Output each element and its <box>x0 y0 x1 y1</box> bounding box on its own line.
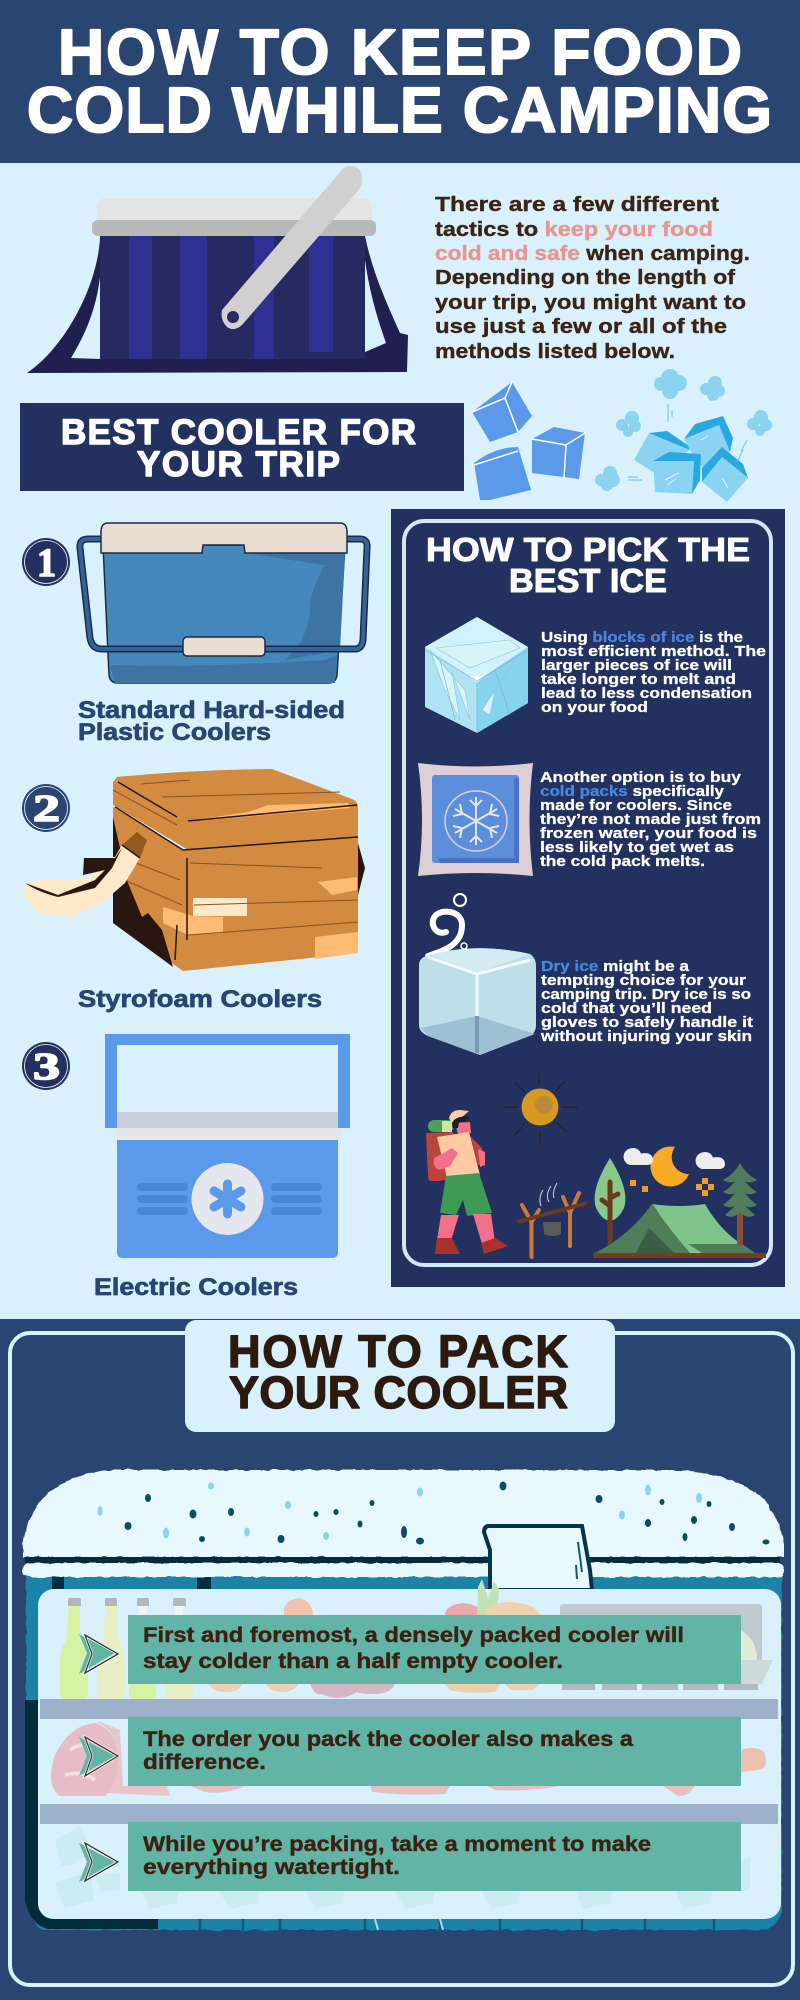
text: cold packs: made for coolers. Since <box>540 798 732 814</box>
icon: hiker <box>426 1110 508 1254</box>
shelf bars <box>40 1699 778 1824</box>
faded food: ice cubes <box>55 1826 750 1909</box>
heading: pick the best ice: BEST ICE <box>509 562 667 599</box>
icon: dry ice with vapour <box>419 894 536 1055</box>
icon: large cooler <box>23 1470 784 1930</box>
heading: how to pack your cooler: YOUR COOLER <box>229 1367 568 1418</box>
heading: pick the best ice <box>426 531 750 599</box>
callout 1: First and foremost, a densely packed cooler will <box>143 1624 684 1647</box>
text: blocks of ice <box>541 630 766 716</box>
text: dry ice: cold that you’ll need <box>541 1001 712 1017</box>
callout 3 <box>128 1822 741 1891</box>
title banner <box>0 0 800 163</box>
text: cold packs: cold packs specifically <box>540 784 724 800</box>
text: blocks of ice: on your food <box>541 700 648 716</box>
callout 1 <box>128 1615 741 1684</box>
number badge 3 <box>22 1042 70 1090</box>
text: dry ice: without injuring your skin <box>540 1029 752 1045</box>
text: cold packs: they’re not made just from <box>540 812 761 828</box>
heading: pick the best ice: HOW TO PICK THE <box>426 531 750 568</box>
number badge 2 <box>22 784 70 832</box>
label: standard hard-sided: Standard Hard-sided <box>78 697 345 724</box>
intro text <box>435 193 750 363</box>
text: dry ice: Dry ice might be a <box>541 959 690 975</box>
text: cold packs: less likely to get wet as <box>540 840 734 856</box>
cooler 3: electric <box>105 1034 350 1258</box>
text: cold packs: the cold pack melts. <box>540 854 705 870</box>
text: dry ice: gloves to safely handle it <box>541 1015 753 1031</box>
number badge 1: 1 <box>37 540 56 585</box>
intro text: your trip, you might want to <box>435 291 746 314</box>
icon: blue ice cubes <box>472 382 585 500</box>
cooler 2: styrofoam <box>22 769 365 971</box>
callout 1: stay colder than a half empty cooler. <box>143 1650 563 1673</box>
callout 2: The order you pack the cooler also makes a <box>143 1728 633 1751</box>
faded food: bottles, fruit and ice tray <box>60 1579 773 1699</box>
text: cold packs: frozen water, your food is <box>540 826 757 842</box>
cooler 1: hard-sided plastic <box>80 523 367 683</box>
panel: how to pick the best ice <box>391 509 785 1287</box>
text: dry ice: tempting choice for your <box>541 973 746 989</box>
icon: cold pack <box>418 763 533 876</box>
icon: navy picnic cooler <box>27 166 408 373</box>
intro text: methods listed below. <box>435 340 675 363</box>
callout 2 <box>128 1717 741 1786</box>
callout 3: While you’re packing, take a moment to make <box>143 1833 651 1856</box>
label: standard hard-sided <box>78 697 345 746</box>
title banner: COLD WHILE CAMPING <box>27 74 772 146</box>
heading: how to pack your cooler: HOW TO PACK <box>228 1326 568 1377</box>
icon: tent, tree and moon scene <box>593 1146 766 1258</box>
text: dry ice: camping trip. Dry ice is so <box>541 987 751 1003</box>
text: blocks of ice: most efficient method. The <box>541 644 766 660</box>
heading: best cooler for your trip: BEST COOLER FOR <box>61 413 416 452</box>
callout 2: difference. <box>143 1751 266 1774</box>
title banner: HOW TO KEEP FOOD <box>58 16 742 88</box>
icon: block of ice <box>425 617 528 733</box>
number badge 2: 2 <box>33 788 60 830</box>
text: cold packs <box>540 770 761 870</box>
icon: campfire pot <box>517 1183 587 1257</box>
intro text: There are a few different <box>435 193 719 216</box>
text: dry ice <box>540 959 753 1045</box>
intro text: use just a few or all of the <box>435 315 727 338</box>
arrow 3 <box>79 1843 118 1882</box>
icon: sun <box>504 1071 578 1145</box>
label: styrofoam coolers: Styrofoam Coolers <box>78 986 322 1013</box>
text: blocks of ice: larger pieces of ice will <box>541 658 732 674</box>
heading: best cooler for your trip <box>20 403 464 491</box>
label: standard hard-sided: Plastic Coolers <box>78 719 271 746</box>
arrow 1 <box>79 1634 118 1674</box>
arrow 2 <box>79 1737 118 1776</box>
text: cold packs: Another option is to buy <box>540 770 741 786</box>
intro text: cold and safe when camping. <box>435 242 750 265</box>
number badge 3: 3 <box>33 1046 60 1088</box>
icon: melting ice cluster <box>595 369 772 502</box>
callout 3: everything watertight. <box>143 1856 400 1879</box>
text: blocks of ice: lead to less condensation <box>541 686 752 702</box>
faded food: meats <box>51 1722 766 1796</box>
section: how to pack your cooler <box>0 1319 800 2000</box>
intro text: Depending on the length of <box>435 266 735 289</box>
intro text: tactics to keep your food <box>435 218 713 241</box>
text: blocks of ice: Using blocks of ice is the <box>541 630 743 646</box>
number badge 1 <box>22 538 70 586</box>
label: electric coolers: Electric Coolers <box>94 1274 298 1301</box>
text: blocks of ice: take longer to melt and <box>541 672 736 688</box>
heading: best cooler for your trip: YOUR TRIP <box>137 445 340 484</box>
heading: how to pack your cooler <box>185 1320 615 1432</box>
